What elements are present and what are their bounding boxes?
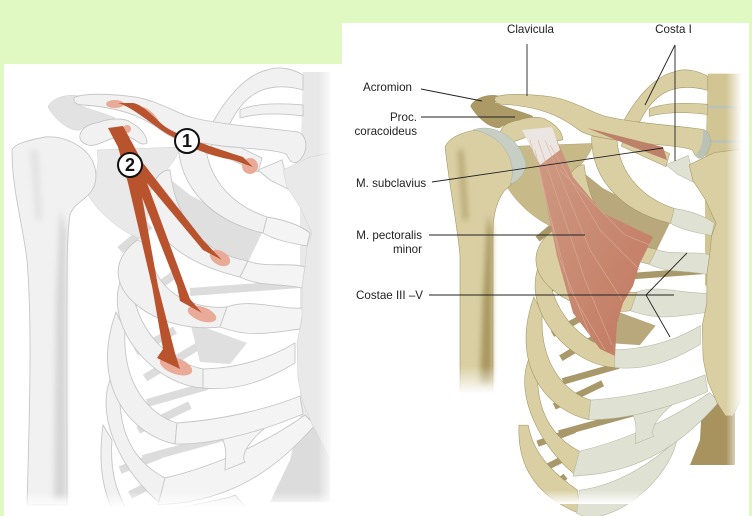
label: M. subclavius: M. subclavius (356, 177, 426, 190)
fade overlays (450, 366, 500, 394)
label: Clavicula (507, 23, 555, 96)
humeral head cartilage (473, 128, 526, 184)
label: Costae III-V: Costae III –V (356, 289, 423, 302)
label: Acromion: Acromion (363, 81, 412, 94)
label: Acromion (363, 81, 482, 101)
clavicle (74, 94, 306, 163)
panel: right anatomical illustration (445, 60, 749, 516)
label: Proc. coracoideus (354, 111, 515, 138)
posterior ribs (120, 175, 300, 495)
ribs two to seven (101, 135, 315, 516)
skeleton mapped from schematic (471, 70, 742, 516)
label: Costa I: Costa I (655, 23, 692, 36)
vertebral column (705, 74, 742, 286)
callout number 2 (118, 153, 142, 177)
coracoid process (500, 117, 563, 142)
callout number 1 (175, 129, 199, 153)
label: M. pectoralis minor: M. pectoralis (356, 229, 422, 242)
M. pectoralis minor tendon (522, 127, 560, 165)
muscle fibres (530, 140, 650, 350)
callout number 2: 2 (125, 155, 135, 175)
posterior ribs (538, 169, 705, 490)
label: Clavicula: Clavicula (507, 23, 555, 36)
label: Proc. coracoideus: Proc. (390, 111, 417, 124)
panel: left schematic of muscles on grey skeleton (4, 64, 342, 516)
scapula (508, 143, 593, 230)
acromion (471, 95, 533, 128)
sternum (689, 149, 742, 416)
first rib, posterior portions (213, 68, 303, 128)
sternum (283, 153, 330, 459)
muscle attachment areas (106, 100, 258, 379)
lower vertebrae (270, 425, 330, 502)
acromion (48, 95, 115, 130)
humerus (12, 137, 96, 505)
humeral shaft shading (458, 150, 492, 385)
label: Costae III-V (356, 253, 687, 337)
M. pectoralis minor muscle (537, 140, 653, 356)
clavicle (495, 94, 710, 158)
M. subclavius muscle (587, 128, 667, 160)
label: M. pectoralis minor (356, 229, 585, 256)
label: Costa I (645, 23, 692, 161)
muscle 1: subclavius (118, 103, 253, 167)
vertebral column (300, 72, 330, 430)
ribs two to seven (519, 132, 719, 516)
scapula (88, 147, 180, 240)
callout number 1: 1 (182, 131, 192, 151)
lower vertebrae (690, 403, 735, 465)
label: M. subclavius (356, 148, 663, 190)
clavicle sternal cartilage (696, 129, 710, 159)
label: M. pectoralis minor: minor (393, 243, 422, 256)
intervertebral discs (708, 107, 742, 142)
label: Proc. coracoideus: coracoideus (354, 125, 417, 138)
humerus (445, 130, 518, 392)
muscle 2: pectoralis minor (108, 126, 222, 369)
coracoid process (80, 119, 147, 146)
first rib (624, 70, 708, 126)
